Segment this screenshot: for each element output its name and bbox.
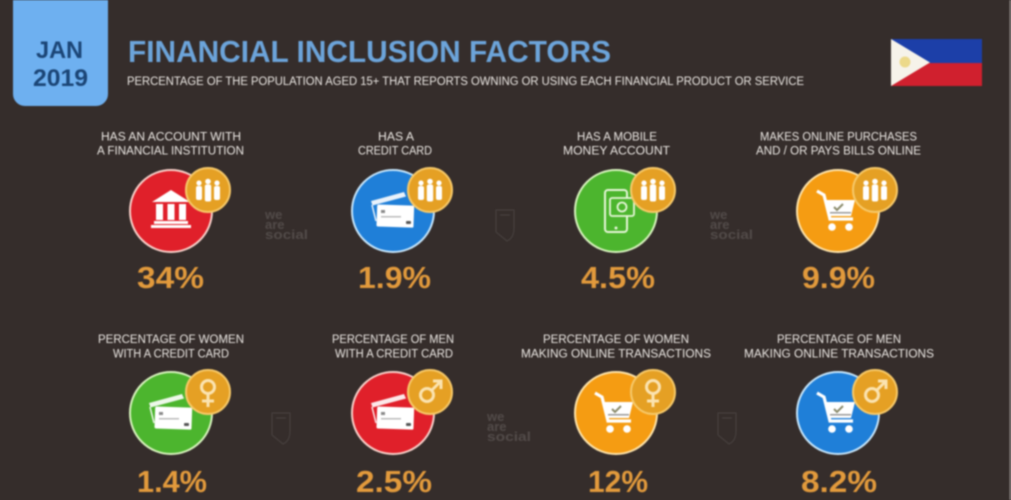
watermark — [272, 413, 290, 444]
label: MAKES ONLINE PURCHASES — [760, 132, 917, 144]
panel: online purchases — [756, 132, 921, 295]
watermark: we — [264, 207, 282, 222]
panel: women with credit card — [98, 334, 244, 499]
watermark: we — [709, 207, 727, 222]
label: MAKING ONLINE TRANSACTIONS — [521, 348, 711, 360]
panel: women online transactions — [521, 334, 711, 499]
label — [756, 132, 921, 158]
label: PERCENTAGE OF WOMEN — [543, 334, 689, 346]
icon: people badge — [186, 168, 230, 212]
label — [98, 334, 244, 360]
label — [332, 334, 454, 360]
icon: male badge — [853, 370, 897, 414]
icon: credit cards — [352, 372, 434, 454]
label: MAKING ONLINE TRANSACTIONS — [744, 348, 934, 360]
value: 12% — [588, 464, 648, 499]
watermark — [718, 413, 736, 444]
panel: men online transactions — [744, 334, 934, 499]
watermark: social — [710, 227, 753, 242]
title: FINANCIAL INCLUSION FACTORS — [128, 35, 611, 69]
icon: bank — [130, 170, 212, 252]
value: 1.4% — [137, 464, 207, 499]
label: A FINANCIAL INSTITUTION — [97, 146, 244, 158]
panel: financial account — [97, 132, 244, 295]
label: PERCENTAGE OF WOMEN — [98, 334, 244, 346]
watermark — [486, 409, 531, 444]
watermark — [496, 210, 514, 241]
icon: shopping cart — [575, 372, 657, 454]
label — [563, 132, 670, 158]
panel: credit card — [352, 132, 452, 295]
panel: mobile money — [563, 132, 675, 295]
value: 9.9% — [802, 260, 875, 295]
date text: JAN — [36, 37, 83, 64]
panel: men with credit card — [332, 334, 454, 499]
date text — [33, 37, 88, 92]
icon: male badge — [408, 370, 452, 414]
date tab — [13, 0, 108, 106]
label: HAS A MOBILE — [577, 132, 657, 144]
value: 1.9% — [358, 260, 431, 295]
icon: credit cards — [352, 170, 434, 252]
watermark: are — [487, 419, 507, 434]
label: MONEY ACCOUNT — [563, 146, 670, 158]
label — [97, 132, 244, 158]
label: CREDIT CARD — [358, 146, 432, 158]
icon: female badge — [186, 370, 230, 414]
value: 8.2% — [801, 464, 877, 499]
value: 2.5% — [356, 464, 432, 499]
watermark: are — [265, 217, 285, 232]
value: 34% — [137, 260, 204, 295]
label: HAS A — [378, 132, 414, 144]
icon: mobile phone — [575, 170, 657, 252]
icon: shopping cart — [797, 170, 879, 252]
label: WITH A CREDIT CARD — [335, 348, 453, 360]
watermark: we — [486, 409, 504, 424]
date text: 2019 — [33, 65, 88, 92]
icon: female badge — [631, 370, 675, 414]
icon: people badge — [408, 168, 452, 212]
label: PERCENTAGE OF MEN — [777, 334, 901, 346]
label — [521, 334, 711, 360]
watermark: social — [487, 429, 531, 444]
icon: people badge — [631, 168, 675, 212]
flag: Philippines — [891, 39, 982, 86]
label — [358, 132, 432, 158]
subtitle: PERCENTAGE OF THE POPULATION AGED 15+ THAT REPORTS OWNING OR USING EACH FINANCIAL PRODUCT OR SERVICE — [127, 76, 804, 88]
label: WITH A CREDIT CARD — [113, 348, 229, 360]
watermark — [264, 207, 308, 242]
icon: shopping cart — [797, 372, 879, 454]
watermark — [709, 207, 753, 242]
label: HAS AN ACCOUNT WITH — [101, 132, 241, 144]
watermark: social — [265, 227, 308, 242]
watermark: are — [710, 217, 730, 232]
label — [744, 334, 934, 360]
label: PERCENTAGE OF MEN — [332, 334, 454, 346]
icon: credit cards — [130, 372, 212, 454]
value: 4.5% — [581, 260, 655, 295]
label: AND / OR PAYS BILLS ONLINE — [756, 146, 921, 158]
icon: people badge — [853, 168, 897, 212]
